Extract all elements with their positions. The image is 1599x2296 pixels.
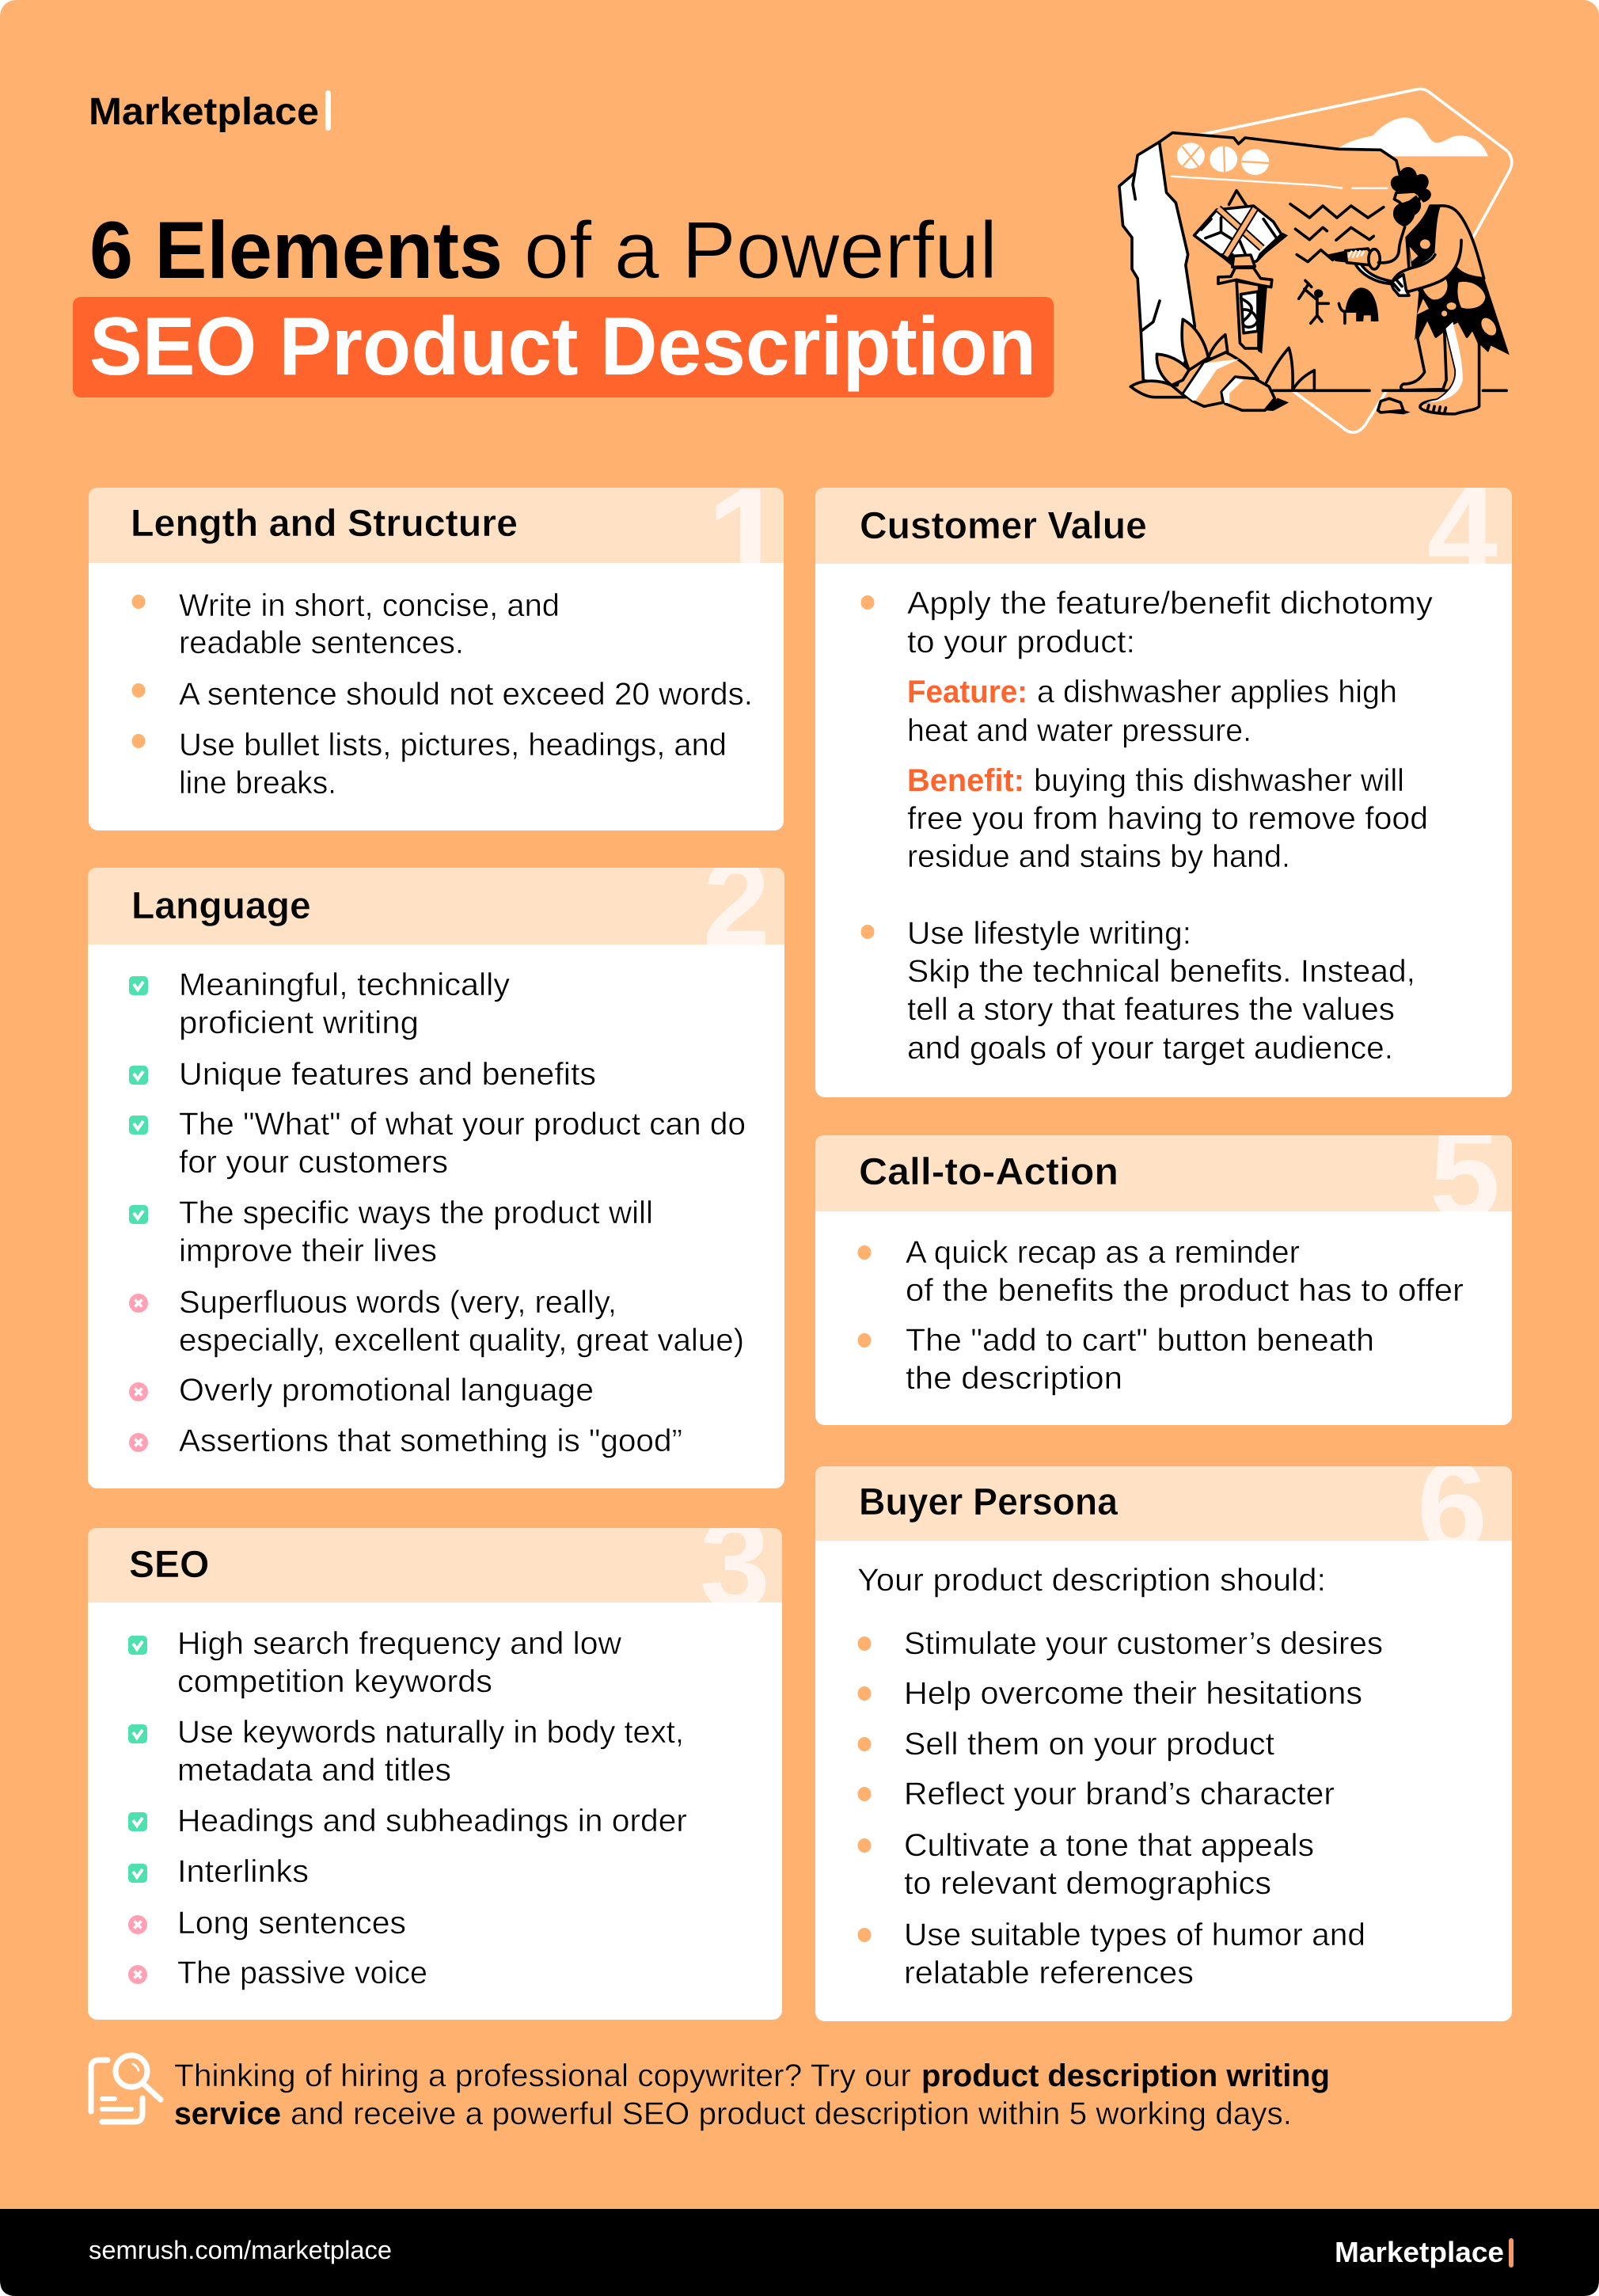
list item: don't <box>129 1285 744 1358</box>
list item: do <box>128 1715 684 1788</box>
list item: lifestyle writing <box>861 916 1415 1066</box>
list item: feature/benefit <box>861 586 1433 660</box>
list item: don't: Long sentences <box>177 1906 406 1941</box>
list item: A quick recap as a reminder <box>906 1235 1300 1270</box>
title: of a Powerful <box>524 205 997 295</box>
list item: to relevant demographics <box>904 1866 1271 1901</box>
title <box>89 205 997 295</box>
subtitle highlight bar: SEO Product Description <box>89 301 1036 393</box>
call-to-action note: product description writing <box>921 2058 1330 2093</box>
list item: don't: especially, excellent quality, great value) <box>179 1323 744 1358</box>
call-to-action note: service <box>174 2096 281 2131</box>
list item: line breaks. <box>179 766 336 800</box>
list item: Stimulate your customer’s desires <box>904 1626 1383 1661</box>
call-to-action note: Thinking of hiring a professional copywriter? Try our <box>174 2058 911 2093</box>
list item <box>858 1235 1464 1308</box>
list item <box>858 1323 1374 1396</box>
list item: do: High search frequency and low <box>177 1626 621 1661</box>
heading: Customer Value <box>860 505 1147 547</box>
heading: Call-to-Action <box>859 1151 1119 1193</box>
benefit example: Benefit: <box>907 763 1024 798</box>
number 1: 1 <box>706 458 788 622</box>
icon: document with magnifier <box>91 2055 161 2122</box>
list item: do: competition keywords <box>177 1664 492 1699</box>
panel: Call-to-Action <box>815 1135 1512 1425</box>
list item <box>858 1828 1314 1901</box>
feature example <box>907 675 1397 748</box>
benefit example: buying this dishwasher will <box>1034 763 1404 798</box>
list item: don't: Assertions that something is "good” <box>179 1424 682 1458</box>
number 5: 5 <box>1430 1103 1500 1245</box>
panel: Language <box>88 836 784 1488</box>
list item: the description <box>906 1361 1122 1396</box>
heading: Language <box>131 885 311 927</box>
heading: Buyer Persona <box>859 1481 1118 1523</box>
number 6: 6 <box>1417 1435 1487 1577</box>
benefit example: free you from having to remove food <box>907 801 1428 836</box>
list item: don't: The passive voice <box>177 1956 427 1990</box>
benefit example: residue and stains by hand. <box>907 839 1290 874</box>
list item: do: improve their lives <box>179 1234 437 1268</box>
feature example: a dishwasher applies high <box>1037 675 1397 709</box>
list item: do: The "What" of what your product can do <box>179 1107 746 1142</box>
benefit example <box>907 763 1428 874</box>
list item: do: Headings and subheadings in order <box>177 1804 687 1838</box>
panel: Length and Structure <box>89 458 788 831</box>
list item: lifestyle writing: Use lifestyle writing: <box>907 916 1191 951</box>
list item: A sentence should not exceed 20 words. <box>179 677 753 712</box>
list item: do <box>129 1196 653 1268</box>
feature example: Feature: <box>907 675 1027 709</box>
list item: Cultivate a tone that appeals <box>904 1828 1314 1863</box>
call-to-action note: and receive a powerful SEO product description within 5 working days. <box>291 2096 1292 2131</box>
list item: relatable references <box>904 1956 1194 1990</box>
list item: feature/benefit: to your product: <box>907 625 1135 660</box>
list item: don't: Overly promotional language <box>179 1373 594 1408</box>
list item: do: Meaningful, technically <box>179 967 510 1002</box>
number 3: 3 <box>700 1492 770 1634</box>
list item: Use suitable types of humor and <box>904 1918 1365 1952</box>
footer logo: Marketplace <box>1335 2236 1504 2268</box>
list item: do: proficient writing <box>179 1005 419 1040</box>
list item: do: The specific ways the product will <box>179 1196 653 1230</box>
footer url: semrush.com/marketplace <box>89 2236 392 2264</box>
list item: lifestyle writing: Skip the technical benefits. Instead, <box>907 954 1415 989</box>
list item <box>131 728 727 800</box>
list item: Help overcome their hesitations <box>904 1676 1362 1711</box>
list item: do <box>129 1107 746 1180</box>
illustration: caveman painting a browser window on a rock <box>1119 89 1512 432</box>
list item: do: Use keywords naturally in body text, <box>177 1715 684 1750</box>
list item: do: Unique features and benefits <box>179 1057 596 1092</box>
list item: do <box>129 967 510 1040</box>
list item: Reflect your brand’s character <box>904 1777 1335 1811</box>
list item: feature/benefit: Apply the feature/benefit dichotomy <box>907 586 1433 621</box>
list item: Write in short, concise, and <box>179 588 560 623</box>
call-to-action note <box>174 2058 1330 2131</box>
heading: Length and Structure <box>131 503 518 545</box>
list item: lifestyle writing: tell a story that features the values <box>907 992 1395 1027</box>
list item: do <box>128 1626 621 1699</box>
logo: Marketplace: Marketplace <box>89 91 319 133</box>
list item: lifestyle writing: and goals of your target audience. <box>907 1031 1393 1066</box>
panel: Buyer Persona <box>815 1435 1512 2021</box>
list item: The "add to cart" button beneath <box>906 1323 1374 1358</box>
list item <box>858 1918 1365 1990</box>
list item: of the benefits the product has to offer <box>906 1273 1464 1308</box>
list item: do: Interlinks <box>177 1854 309 1889</box>
list item <box>131 588 560 660</box>
list item: do: for your customers <box>179 1145 448 1180</box>
intro text: Your product description should: <box>857 1563 1326 1598</box>
panel: SEO <box>88 1492 782 2020</box>
list item: do: metadata and titles <box>177 1753 451 1788</box>
list item: Use bullet lists, pictures, headings, and <box>179 728 727 762</box>
number 4: 4 <box>1427 459 1498 601</box>
feature example: heat and water pressure. <box>907 713 1251 748</box>
title: 6 Elements <box>89 205 503 295</box>
number 2: 2 <box>703 836 770 971</box>
list item: readable sentences. <box>179 625 464 660</box>
panel: Customer Value <box>815 459 1512 1097</box>
list item: Sell them on your product <box>904 1727 1274 1762</box>
list item: don't: Superfluous words (very, really, <box>179 1285 617 1320</box>
footer bar <box>0 2209 1599 2296</box>
heading: SEO <box>129 1544 209 1586</box>
